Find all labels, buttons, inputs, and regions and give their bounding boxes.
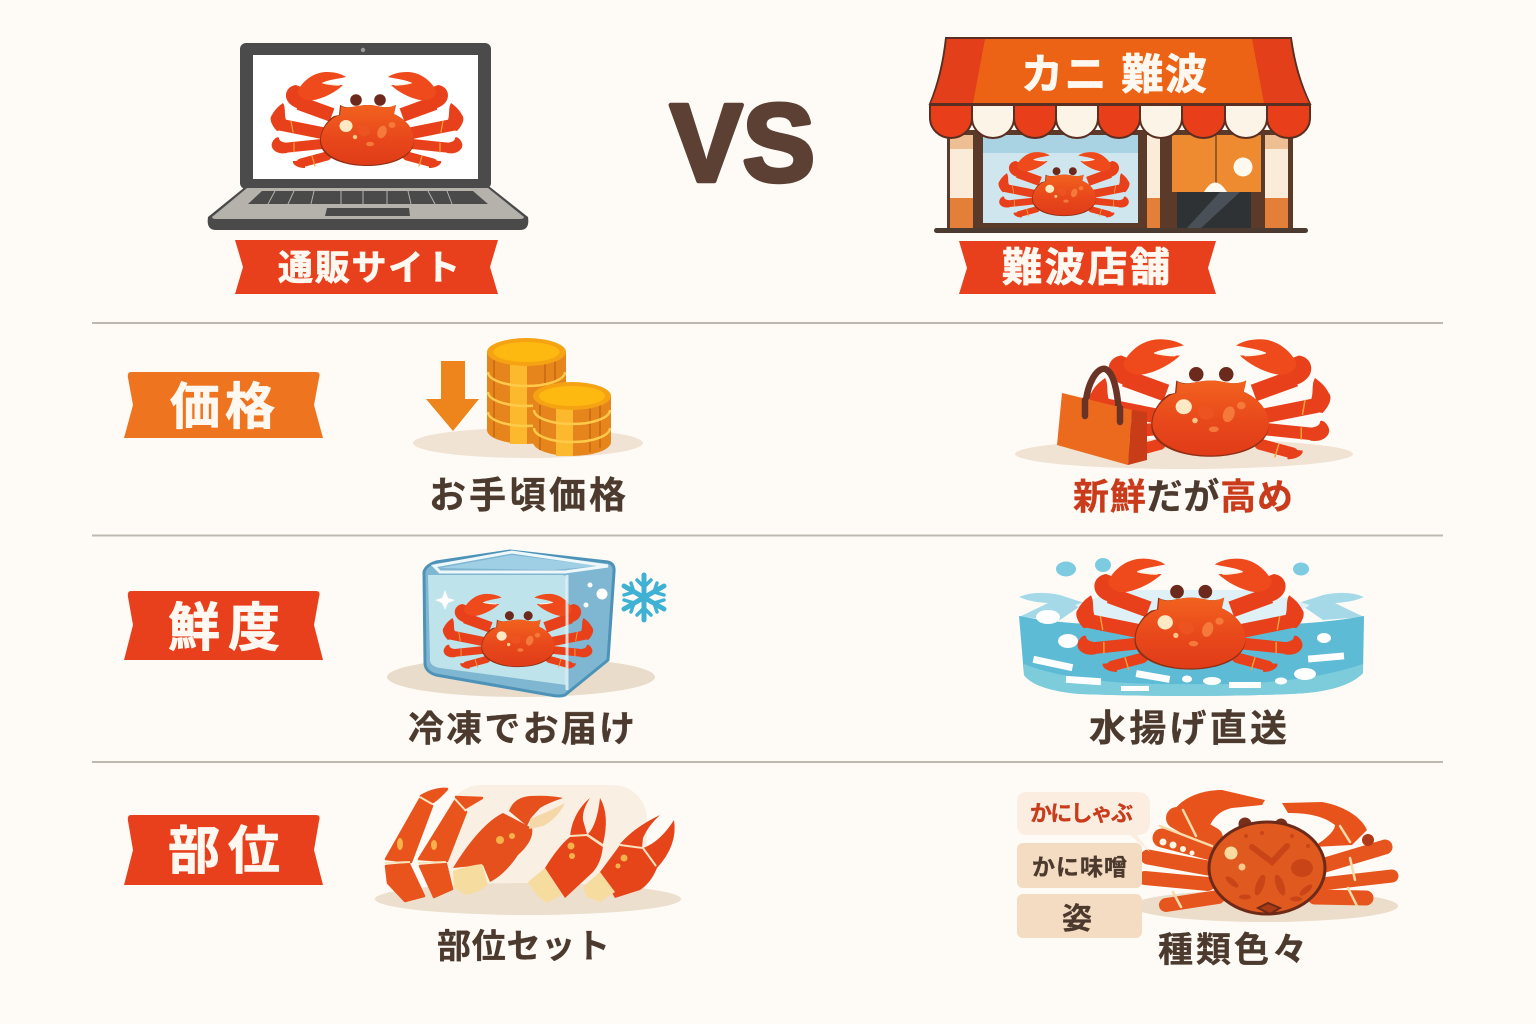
icon: laptop with crab [208,43,528,230]
icon: storefront with crab [930,38,1310,233]
caption: 冷凍でお届け: 冷凍でお届け [408,708,635,749]
tag: かにしゃぶ [1017,792,1150,852]
tag: かに味噌 [1017,843,1142,888]
caption: 種類色々: 種類色々 [1158,931,1307,970]
icon: crab in ice cube with snowflake [387,551,664,697]
heading: VS: VS [670,82,815,205]
icon: crab in sea water [1019,558,1364,696]
row label: 鮮度 [124,591,323,660]
tag stack: crab product types [1017,792,1150,938]
row label: 部位 [124,815,323,885]
ribbon: 難波店舗 [959,241,1216,294]
tag: かに味噌: かに味噌 [1032,854,1127,880]
tag: 姿 [1017,894,1142,938]
caption: 水揚げ直送: 水揚げ直送 [1089,708,1287,749]
caption: 部位セット: 部位セット [437,928,610,966]
caption: お手頃価格: お手頃価格 [429,475,626,516]
row label: 部位: 部位 [168,823,280,881]
ribbon: 通販サイト: 通販サイト [278,249,460,288]
tag: 姿: 姿 [1062,903,1092,936]
tag: かにしゃぶ: かにしゃぶ [1030,801,1133,826]
row label: 鮮度: 鮮度 [168,600,280,658]
icon: textured whole crab [1132,790,1398,922]
row label: 価格 [124,372,323,438]
icon: storefront with crab: カニ 難波 [1021,51,1207,98]
caption: 新鮮だが高め: 新鮮だが高め [1073,476,1293,517]
row label: 価格: 価格 [170,379,275,435]
ribbon: 通販サイト [235,240,498,294]
icon: down arrow and coins [413,338,643,458]
ribbon: 難波店舗: 難波店舗 [1002,246,1170,290]
icon: crab parts set [375,785,681,915]
icon: crab with shopping bag [1015,339,1353,469]
